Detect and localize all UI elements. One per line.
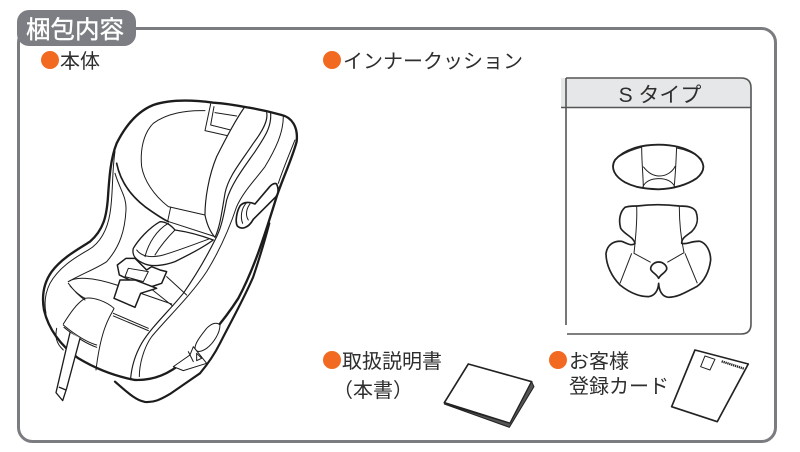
label: customer registration card: 登録カード [569,375,669,398]
illustration: child seat [43,101,297,402]
icon: head cushion [613,145,703,189]
shell inner lines [45,152,115,313]
tether strap [56,333,80,401]
label: main unit [41,50,100,73]
headrest [141,111,205,215]
recline handle [236,183,278,228]
S type header: S タイプ [619,84,701,107]
heading: package contents: 梱包内容 [26,16,124,44]
cushion lines [63,283,148,347]
label: main unit: 本体 [60,50,100,73]
seat shell outline [43,101,297,380]
seat base [115,223,269,402]
heading: package contents [17,10,136,46]
icon: body cushion [606,205,711,297]
label: customer registration card [549,350,669,398]
lower detail [195,323,220,351]
icon: registration postcard [672,350,748,422]
label: instruction manual: 取扱説明書 [342,350,442,373]
label: instruction manual [323,350,442,402]
panel: S type [561,78,751,334]
lap belts and seat arc [68,277,187,306]
label: instruction manual: （本書） [333,379,413,402]
label: inner cushion: インナークッション [343,50,523,73]
shoulder harness pads [133,222,213,266]
head adjuster tab [205,104,243,137]
label: customer registration card: お客様 [569,350,629,373]
icon: manual booklet [444,364,534,427]
S type header [561,78,751,107]
side wing [205,108,267,237]
buckle and crotch strap [114,258,167,307]
